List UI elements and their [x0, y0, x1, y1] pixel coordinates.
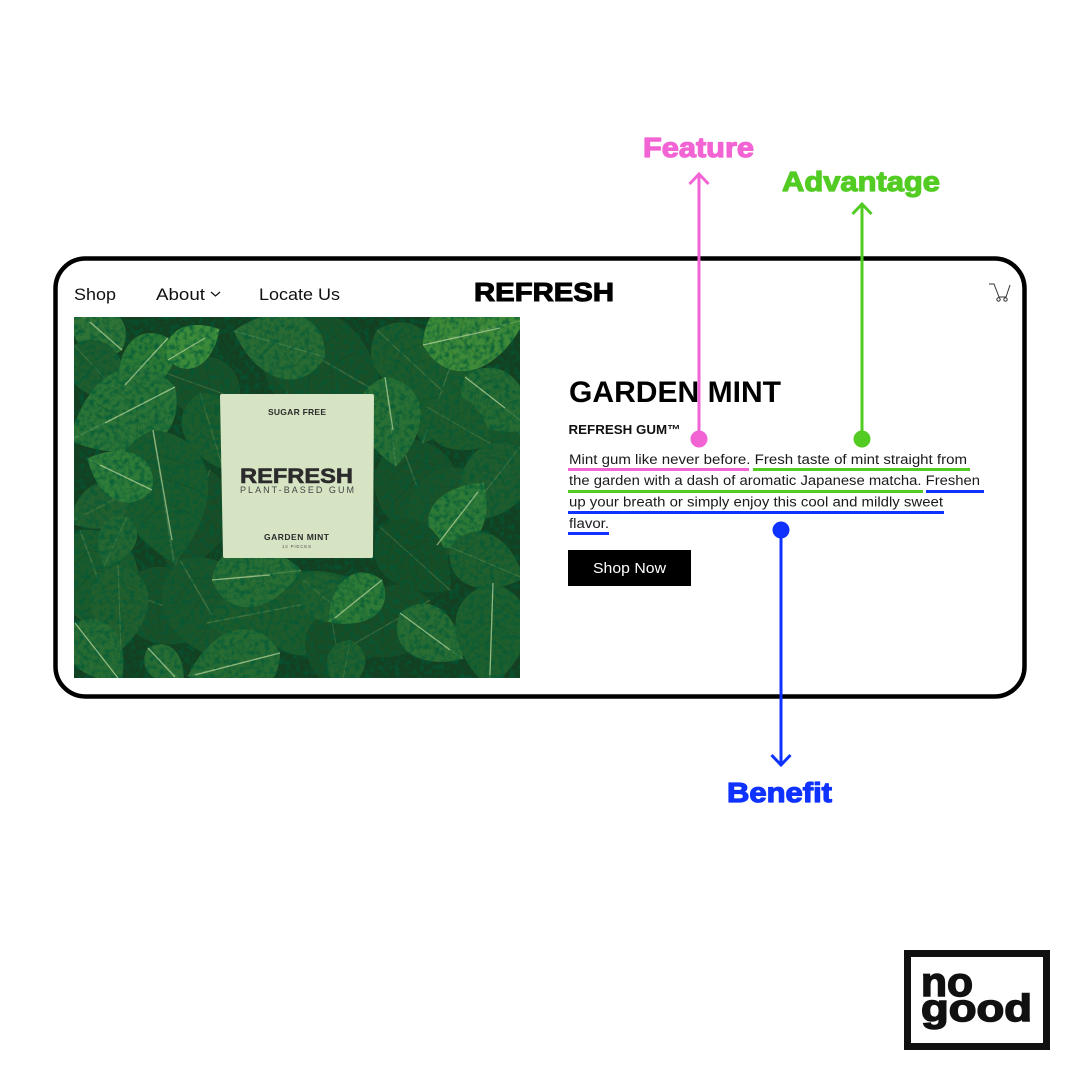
product description text: [569, 452, 980, 531]
product heading: GARDEN MINT: GARDEN MINT: [569, 376, 781, 409]
box text: PLANT-BASED GUM: PLANT-BASED GUM: [240, 485, 354, 495]
box text: REFRESH: REFRESH: [240, 465, 353, 488]
product description text: the garden with a dash of aromatic Japanese matcha. Freshen: [569, 473, 980, 488]
box text: 12 PIECES: 12 PIECES: [282, 544, 311, 549]
subheading: REFRESH GUM: REFRESH GUM™: [568, 422, 680, 437]
product description text: Mint gum like never before. Fresh taste of mint straight from: [569, 452, 967, 467]
arrow: advantage: [852, 204, 872, 448]
icon: shopping cart: [989, 284, 1010, 301]
logo: no good: good: [921, 988, 1032, 1030]
brand logo: REFRESH: REFRESH: [474, 277, 614, 307]
nav link: About with chevron: [156, 286, 220, 304]
gum box: [220, 394, 374, 558]
product photo: mint leaves with gum box: [74, 317, 520, 678]
nav link: About with chevron: About: [156, 286, 205, 304]
mint leaves background: [74, 317, 520, 678]
product description text: up your breath or simply enjoy this cool and mildly sweet: [569, 494, 943, 510]
card outline: [56, 258, 1024, 696]
arrow: feature: [690, 174, 708, 448]
arrow: benefit: [772, 522, 790, 765]
underline: benefit sentence: [568, 490, 984, 535]
label: Benefit: Benefit: [727, 777, 832, 808]
nav link: Locate Us: Locate Us: [259, 286, 340, 304]
button: Shop Now: [568, 550, 691, 586]
logo: no good: [908, 954, 1046, 1046]
product description text: flavor.: [569, 516, 609, 531]
label: Advantage: Advantage: [782, 166, 940, 197]
logo: no good: no: [921, 959, 973, 1005]
label: Feature: Feature: [643, 132, 754, 163]
box text: SUGAR FREE: SUGAR FREE: [268, 407, 326, 417]
underline: feature sentence: [568, 468, 749, 471]
button: Shop Now: Shop Now: [593, 560, 666, 577]
box text: GARDEN MINT: GARDEN MINT: [264, 532, 330, 542]
nav link: Shop: Shop: [74, 286, 116, 304]
underline: advantage sentence: [568, 468, 970, 493]
navigation bar: [74, 277, 1010, 307]
